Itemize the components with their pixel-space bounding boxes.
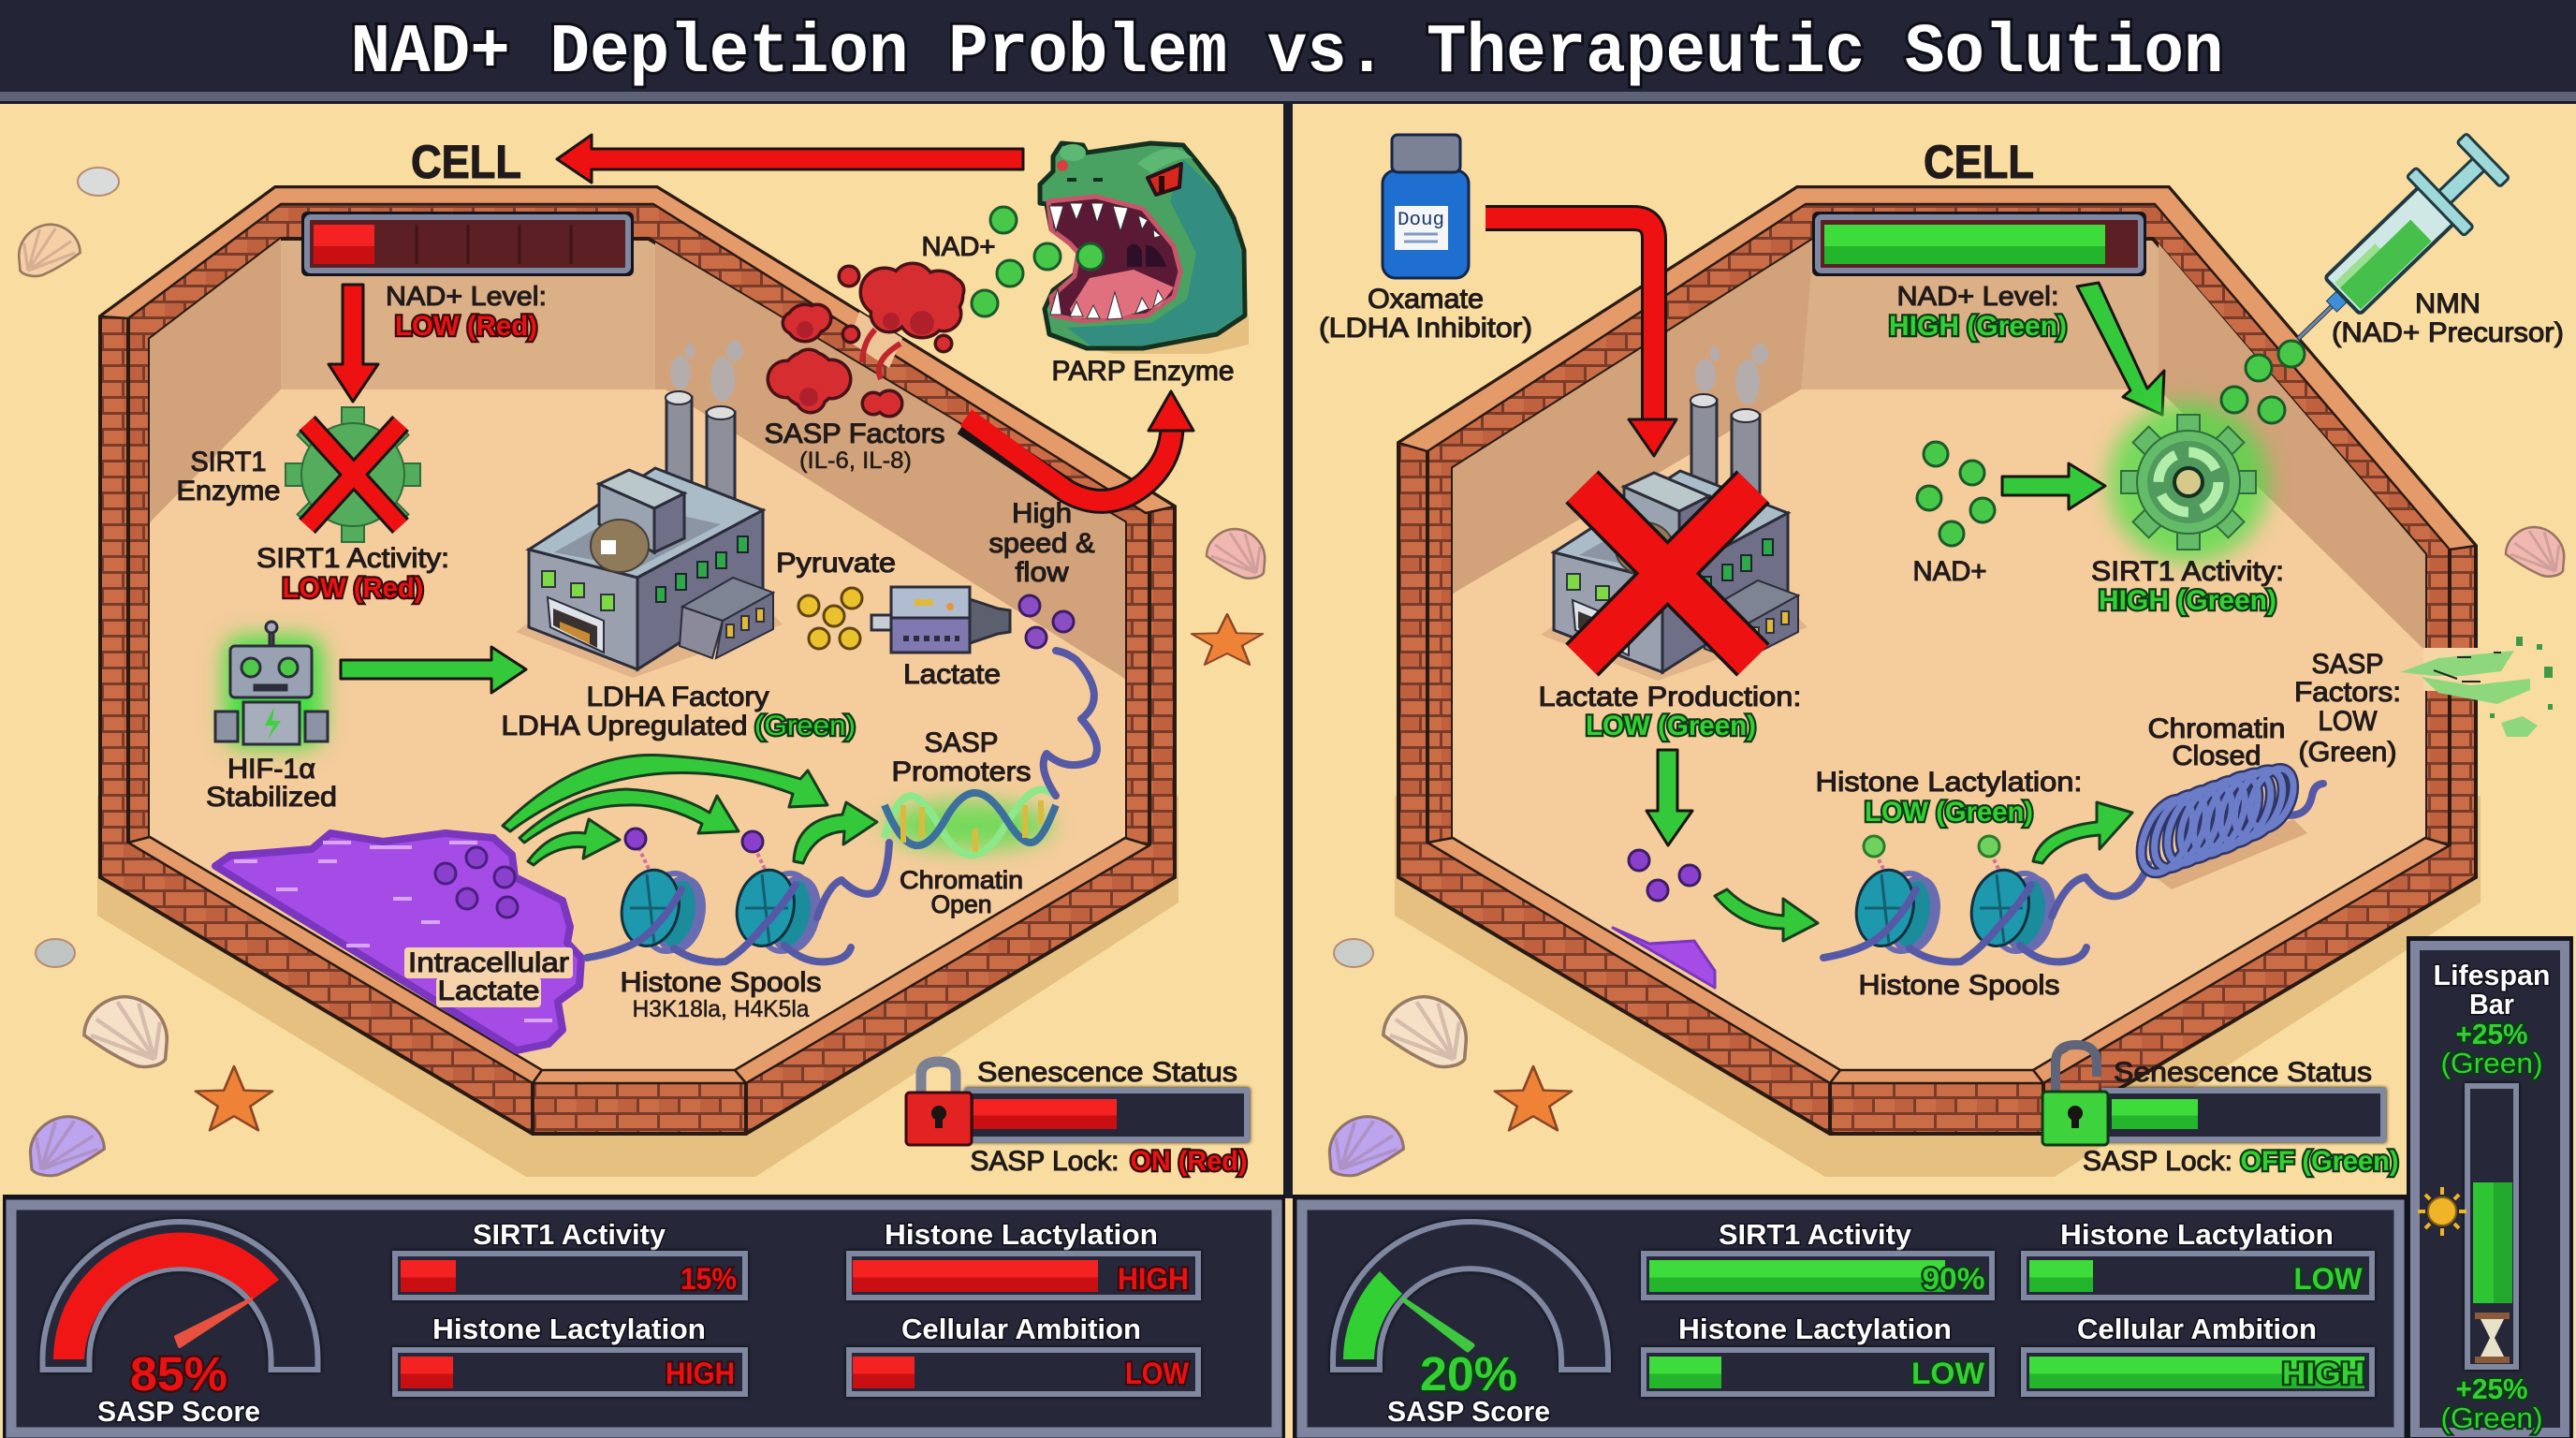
arrow: oxamate to factory bbox=[1486, 218, 1676, 456]
gauge: SASP score 85% bbox=[43, 1222, 318, 1428]
icon: open green padlock bbox=[2042, 1045, 2108, 1145]
senescence status lock bar off bbox=[2042, 1045, 2383, 1145]
gauge: SASP score 20%: SASP Score bbox=[1387, 1395, 1550, 1428]
icon: NMN syringe bbox=[2269, 125, 2516, 369]
icon: HIF-1 alpha robot bbox=[215, 622, 328, 747]
LDHA label: LDHA Factory bbox=[586, 682, 769, 712]
lactate molecules bbox=[1019, 595, 1074, 648]
NAD+ label near PARP: NAD+ bbox=[921, 232, 996, 262]
chromatin open label: Open bbox=[930, 890, 992, 918]
lifespan heading: +25% bbox=[2456, 1018, 2527, 1050]
meter: cellular ambition high bbox=[2024, 1313, 2372, 1394]
bottle label text: Doug bbox=[1398, 210, 1444, 231]
SASP factors low label: Factors: bbox=[2294, 677, 2401, 708]
high speed and flow label: speed & bbox=[988, 528, 1095, 559]
PARP enzyme label: PARP Enzyme bbox=[1052, 356, 1234, 387]
histone spools label: Histone Spools bbox=[620, 967, 822, 998]
meter: histone lactylation low second: LOW bbox=[1911, 1357, 1985, 1390]
panel: therapeutic solution bbox=[1319, 125, 2564, 1177]
lactate molecules small bbox=[1629, 850, 1700, 901]
NAD+ molecules inside cell bbox=[1917, 442, 1995, 546]
arrow: lactate to histones bbox=[1715, 889, 1818, 941]
NAD+ level bar bbox=[301, 212, 634, 276]
icon: lactate machine bbox=[871, 587, 1010, 653]
SASP promoters label: SASP bbox=[925, 727, 998, 758]
histone spools label bbox=[620, 967, 822, 1022]
lactate production label: Lactate Production: bbox=[1539, 682, 1801, 712]
lifespan footer value: (Green) bbox=[2441, 1401, 2542, 1434]
vertical lifespan meter bbox=[2467, 1086, 2516, 1367]
meter: histone lactylation low second bbox=[1644, 1313, 1992, 1394]
dashboard: solution metrics bbox=[1293, 1195, 2408, 1438]
closed chromatin coil bbox=[2052, 762, 2323, 917]
pyruvate molecules bbox=[798, 588, 862, 649]
meter: histone lactylation low: Histone Lactylation bbox=[2060, 1218, 2334, 1251]
meter: SIRT1 activity 90%: SIRT1 Activity bbox=[1719, 1218, 1912, 1251]
histone lactylation label bbox=[1816, 767, 2082, 828]
NAD+ molecules consumed bbox=[972, 207, 1104, 316]
gauge: SASP score 20%: 20% bbox=[1420, 1347, 1517, 1401]
cell wall bbox=[97, 187, 1178, 1177]
arrow: NAD+ level to SIRT1 bbox=[329, 285, 378, 402]
intracellular lactate label bbox=[404, 947, 573, 1007]
cell label right: CELL bbox=[1924, 136, 2034, 188]
SASP factors label: (IL-6, IL-8) bbox=[799, 448, 912, 474]
arrow: NAD+ to SIRT1 bbox=[2002, 463, 2105, 509]
chromatin open label: Chromatin bbox=[900, 866, 1023, 894]
SASP lock status bbox=[970, 1146, 1247, 1177]
meter: histone lactylation high second bbox=[395, 1313, 745, 1394]
NAD+ level label high: NAD+ Level: bbox=[1896, 282, 2059, 312]
chromatin closed label bbox=[2147, 713, 2286, 771]
SIRT1 activity label high: SIRT1 Activity: bbox=[2091, 556, 2284, 587]
NAD+ level label: NAD+ Level: bbox=[386, 282, 547, 312]
HIF-1 alpha label: HIF-1α bbox=[227, 754, 315, 785]
SASP factors low label: (Green) bbox=[2299, 737, 2396, 768]
header bar bbox=[0, 0, 2576, 104]
high speed and flow label: High bbox=[1012, 498, 1072, 529]
pyruvate label: Pyruvate bbox=[776, 548, 896, 579]
meter: histone lactylation low: LOW bbox=[2293, 1262, 2363, 1296]
lactate label: Lactate bbox=[903, 659, 1001, 690]
arrow: SASP exit curving to PARP bbox=[964, 391, 1193, 501]
arrow: PARP to cell bbox=[557, 135, 1023, 183]
SASP lock off status: SASP Lock: bbox=[2083, 1146, 2232, 1177]
NAD+ level label: LOW (Red) bbox=[395, 311, 537, 342]
HIF-1 alpha label bbox=[206, 754, 337, 813]
small lactate pool bbox=[1613, 928, 1715, 988]
arrows: lactate to histones bbox=[503, 755, 877, 865]
arrow: HIF-1 alpha to factory bbox=[341, 647, 526, 693]
meter: histone lactylation low second: Histone Lactylation bbox=[1678, 1313, 1952, 1345]
NAD+ level label high: HIGH (Green) bbox=[1889, 311, 2067, 342]
DNA open chromatin helix bbox=[817, 651, 1097, 917]
meter: histone lactylation high bbox=[849, 1218, 1198, 1298]
icon: red X over factory bbox=[1582, 487, 1753, 660]
lifespan footer value: +25% bbox=[2456, 1372, 2527, 1405]
NMN molecules bbox=[2221, 341, 2305, 423]
panel: lifespan bar bbox=[2407, 936, 2573, 1438]
arrow: histones to closed chromatin bbox=[2033, 802, 2132, 863]
histone spools label right: Histone Spools bbox=[1859, 970, 2059, 1001]
senescence status label: Senescence Status bbox=[977, 1057, 1237, 1088]
senescence status lock bar bbox=[906, 1057, 1247, 1145]
oxamate label: Oxamate bbox=[1368, 284, 1484, 315]
high speed and flow label: flow bbox=[1015, 557, 1069, 588]
histone spools label: H3K18la, H4K5la bbox=[633, 996, 810, 1022]
high speed and flow label bbox=[988, 498, 1095, 588]
SASP lock status: ON (Red) bbox=[1131, 1146, 1247, 1177]
SASP factors low label bbox=[2294, 649, 2401, 768]
lifespan heading: Lifespan bbox=[2434, 959, 2550, 991]
dashboard: problem metrics bbox=[3, 1195, 1285, 1438]
NAD+ level label bbox=[386, 282, 547, 342]
lactate production label: LOW (Green) bbox=[1586, 711, 1756, 741]
histone spools with lactyl marks bbox=[587, 829, 851, 961]
icon: hourglass bbox=[2475, 1313, 2510, 1363]
chromatin open label bbox=[900, 866, 1023, 918]
icon: sun bbox=[2418, 1187, 2466, 1236]
SASP factors label: SASP Factors bbox=[764, 418, 945, 449]
meter: SIRT1 activity 90% bbox=[1644, 1218, 1992, 1298]
intracellular lactate label: Lactate bbox=[438, 976, 539, 1006]
SIRT1 enzyme label: SIRT1 bbox=[191, 447, 266, 477]
arrow: lactate production down bbox=[1647, 750, 1692, 845]
lifespan heading: Bar bbox=[2469, 988, 2514, 1020]
chromatin closed label: Chromatin bbox=[2147, 713, 2286, 744]
gauge: SASP score 20% bbox=[1333, 1222, 1608, 1428]
SASP factors low label: SASP bbox=[2312, 649, 2383, 680]
SIRT1 enzyme label: Enzyme bbox=[176, 476, 281, 506]
LDHA label: LDHA Upregulated bbox=[502, 711, 747, 741]
NMN label: NMN bbox=[2415, 288, 2481, 319]
panel: NAD+ depletion problem bbox=[19, 103, 1293, 1198]
icon: LDHA factory bbox=[516, 341, 783, 678]
meter: SIRT1 activity 15% bbox=[395, 1218, 745, 1298]
NMN label: (NAD+ Precursor) bbox=[2332, 317, 2564, 348]
meter: cellular ambition low: LOW bbox=[1125, 1357, 1190, 1390]
lactate production label bbox=[1539, 682, 1801, 741]
intracellular lactate pool bbox=[215, 833, 581, 1050]
SIRT1 activity label bbox=[256, 543, 449, 604]
cell wall right bbox=[1395, 187, 2481, 1177]
SASP promoters label: Promoters bbox=[891, 756, 1032, 787]
meter: histone lactylation high second: Histone Lactylation bbox=[432, 1313, 706, 1345]
meter: cellular ambition high: HIGH bbox=[2282, 1357, 2364, 1390]
LDHA label: (Green) bbox=[754, 711, 856, 741]
arrow: NAD+ level to SIRT1 bbox=[2077, 283, 2164, 415]
SASP factor clouds bbox=[769, 265, 962, 415]
meter: histone lactylation high: HIGH bbox=[1118, 1262, 1189, 1296]
SASP lock off status: OFF (Green) bbox=[2241, 1146, 2398, 1177]
icon: closed red padlock bbox=[906, 1062, 972, 1145]
meter: SIRT1 activity 15%: 15% bbox=[681, 1262, 737, 1296]
decorative shells, pebbles and starfish right bbox=[1329, 527, 2564, 1176]
meter: histone lactylation high: Histone Lactylation bbox=[885, 1218, 1158, 1251]
NAD+ label: NAD+ bbox=[1913, 556, 1986, 587]
dissipating green SASP puff bbox=[2400, 637, 2553, 737]
SIRT1 activity label: LOW (Red) bbox=[283, 573, 423, 604]
SASP factors label bbox=[764, 418, 945, 474]
gauge: SASP score 85%: SASP Score bbox=[97, 1395, 260, 1428]
meter: histone lactylation high second: HIGH bbox=[666, 1357, 735, 1390]
histone lactylation label: LOW (Green) bbox=[1865, 797, 2033, 828]
LDHA label bbox=[502, 682, 856, 741]
senescence status label: Senescence Status bbox=[2114, 1057, 2372, 1088]
meter: cellular ambition high: Cellular Ambition bbox=[2077, 1313, 2317, 1345]
icon: blocked factory bbox=[1541, 344, 1808, 681]
icon: PARP monster bbox=[1040, 143, 1249, 354]
NMN label bbox=[2332, 288, 2564, 348]
SIRT1 activity label: SIRT1 Activity: bbox=[256, 543, 449, 574]
histone spools closed bbox=[1823, 836, 2086, 961]
icon: inhibited SIRT1 gear bbox=[285, 407, 420, 542]
cell label: CELL bbox=[411, 136, 521, 188]
SIRT1 enzyme label bbox=[176, 447, 281, 506]
meter: cellular ambition low bbox=[849, 1313, 1198, 1394]
SASP promoters label bbox=[891, 727, 1032, 787]
SIRT1 activity label high bbox=[2091, 556, 2284, 616]
NAD+ level label high bbox=[1889, 282, 2067, 342]
gauge: SASP score 85%: 85% bbox=[130, 1347, 227, 1401]
lifespan footer value bbox=[2441, 1372, 2542, 1434]
SASP lock status: SASP Lock: bbox=[970, 1146, 1120, 1177]
decorative shells, pebbles and starfish bbox=[19, 168, 1265, 1176]
SASP factors low label: LOW bbox=[2318, 706, 2378, 737]
HIF-1 alpha label: Stabilized bbox=[206, 782, 337, 813]
meter: histone lactylation low bbox=[2024, 1218, 2372, 1298]
icon: active SIRT1 gear bbox=[2108, 402, 2269, 563]
SIRT1 activity label high: HIGH (Green) bbox=[2099, 585, 2276, 616]
icon: oxamate bottle bbox=[1383, 135, 1469, 278]
oxamate label bbox=[1319, 284, 1532, 344]
intracellular lactate label: Intracellular bbox=[408, 947, 569, 978]
meter: cellular ambition low: Cellular Ambition bbox=[901, 1313, 1141, 1345]
histone lactylation label: Histone Lactylation: bbox=[1816, 767, 2082, 798]
meter: SIRT1 activity 90%: 90% bbox=[1923, 1262, 1984, 1296]
title: NAD+ Depletion Problem vs. Therapeutic Solution bbox=[350, 14, 2224, 93]
oxamate label: (LDHA Inhibitor) bbox=[1319, 313, 1532, 344]
NAD+ level bar high bbox=[1812, 212, 2146, 276]
chromatin closed label: Closed bbox=[2172, 741, 2261, 771]
lifespan heading: (Green) bbox=[2441, 1047, 2542, 1079]
SASP lock off status bbox=[2083, 1146, 2398, 1177]
meter: SIRT1 activity 15%: SIRT1 Activity bbox=[473, 1218, 666, 1251]
lifespan heading bbox=[2434, 959, 2550, 1079]
